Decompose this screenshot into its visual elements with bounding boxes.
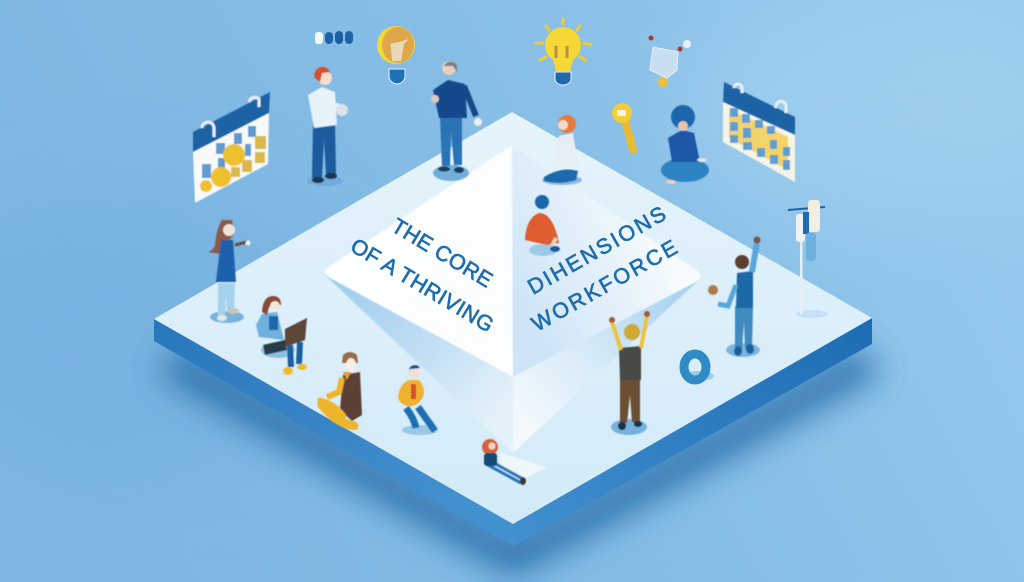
pyramid upper left face	[325, 145, 513, 377]
icon: yellow magnifier	[612, 103, 633, 150]
person: woman standing with long hair	[208, 220, 250, 323]
platform left side	[154, 319, 513, 546]
person: red jumper on pyramid	[525, 195, 560, 256]
central pyramid	[323, 145, 702, 453]
pyramid lower left face	[323, 273, 513, 453]
isometric platform	[154, 112, 872, 546]
person: arms raised	[609, 311, 650, 435]
icon: coin light bulb	[377, 26, 415, 84]
icon: plastic bag with pins	[648, 36, 691, 87]
icon: blue ring	[682, 354, 714, 381]
person: lying, red hair	[482, 439, 547, 485]
icon: dots	[315, 31, 353, 44]
icon: IV stand	[788, 200, 828, 318]
person: white shirt, red hair	[307, 67, 348, 186]
title: right lines: WORKFORCE	[528, 235, 681, 336]
platform right side	[513, 318, 872, 546]
person: reaching up with blue vest	[708, 236, 760, 357]
pyramid upper right face	[512, 145, 700, 377]
title: left lines: THE CORE	[387, 214, 497, 292]
platform top face	[154, 112, 872, 524]
icon: yellow light bulb	[536, 19, 591, 85]
person: sitting cross-legged, yellow	[320, 352, 362, 426]
platform shadow	[160, 345, 880, 578]
icon: left calendar	[193, 92, 270, 203]
person: sitting, orange jacket	[398, 365, 438, 435]
person: with laptop	[256, 296, 307, 375]
person: navy jacket	[431, 61, 482, 181]
person: seated, orange hair	[542, 115, 582, 185]
person: seated blue with round hair	[661, 105, 709, 184]
pyramid lower right face	[513, 277, 702, 453]
title: right lines: DIHENSIONS	[524, 202, 670, 299]
icon: right calendar	[723, 82, 795, 182]
title: left lines: OF A THRIVING	[346, 234, 498, 337]
